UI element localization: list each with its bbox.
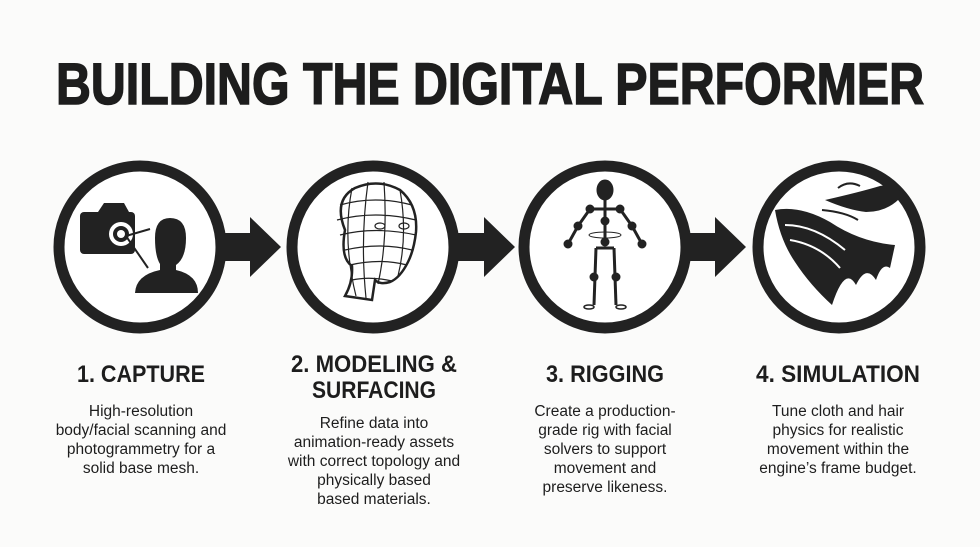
icon: skeleton xyxy=(565,181,645,309)
text: capture: body/facial scanning and xyxy=(56,422,226,439)
heading: modeling: 2. MODELING & xyxy=(291,351,457,378)
icon: person xyxy=(126,218,198,293)
heading: rigging: 3. RIGGING xyxy=(546,361,664,388)
panel: simulation icon xyxy=(758,166,920,328)
text: modeling: physically based xyxy=(317,472,431,489)
arrow 3 xyxy=(682,217,746,277)
text: rigging: preserve likeness. xyxy=(543,479,667,496)
text: capture: photogrammetry for a xyxy=(67,441,215,458)
text: capture: solid base mesh. xyxy=(83,460,199,477)
arrow 1 xyxy=(215,217,281,277)
icon: wireframe head xyxy=(337,182,416,300)
text: simulation: engine’s frame budget. xyxy=(759,460,917,477)
icon: camera xyxy=(80,203,135,254)
text: simulation: movement within the xyxy=(767,441,909,458)
text: simulation: Tune cloth and hair xyxy=(772,403,904,420)
text: modeling: with correct topology and xyxy=(287,453,460,470)
panel: rigging icon xyxy=(524,166,686,328)
text: capture: High-resolution xyxy=(89,403,193,420)
text: modeling: Refine data into xyxy=(320,415,428,432)
icon: cloth and hair xyxy=(775,183,902,305)
panel: capture icon xyxy=(59,166,221,328)
heading: modeling: SURFACING xyxy=(312,377,436,404)
text: rigging: movement and xyxy=(554,460,656,477)
text: rigging: grade rig with facial xyxy=(538,422,672,439)
text: modeling: animation-ready assets xyxy=(294,434,454,451)
text: rigging: Create a production- xyxy=(534,403,676,420)
arrow 2 xyxy=(450,217,515,277)
text: simulation: physics for realistic xyxy=(773,422,904,439)
heading: capture: 1. CAPTURE xyxy=(77,361,205,388)
text: modeling: based materials. xyxy=(317,491,431,508)
panel: modeling icon xyxy=(292,166,454,328)
heading: simulation: 4. SIMULATION xyxy=(756,361,920,388)
text: rigging: solvers to support xyxy=(544,441,667,458)
